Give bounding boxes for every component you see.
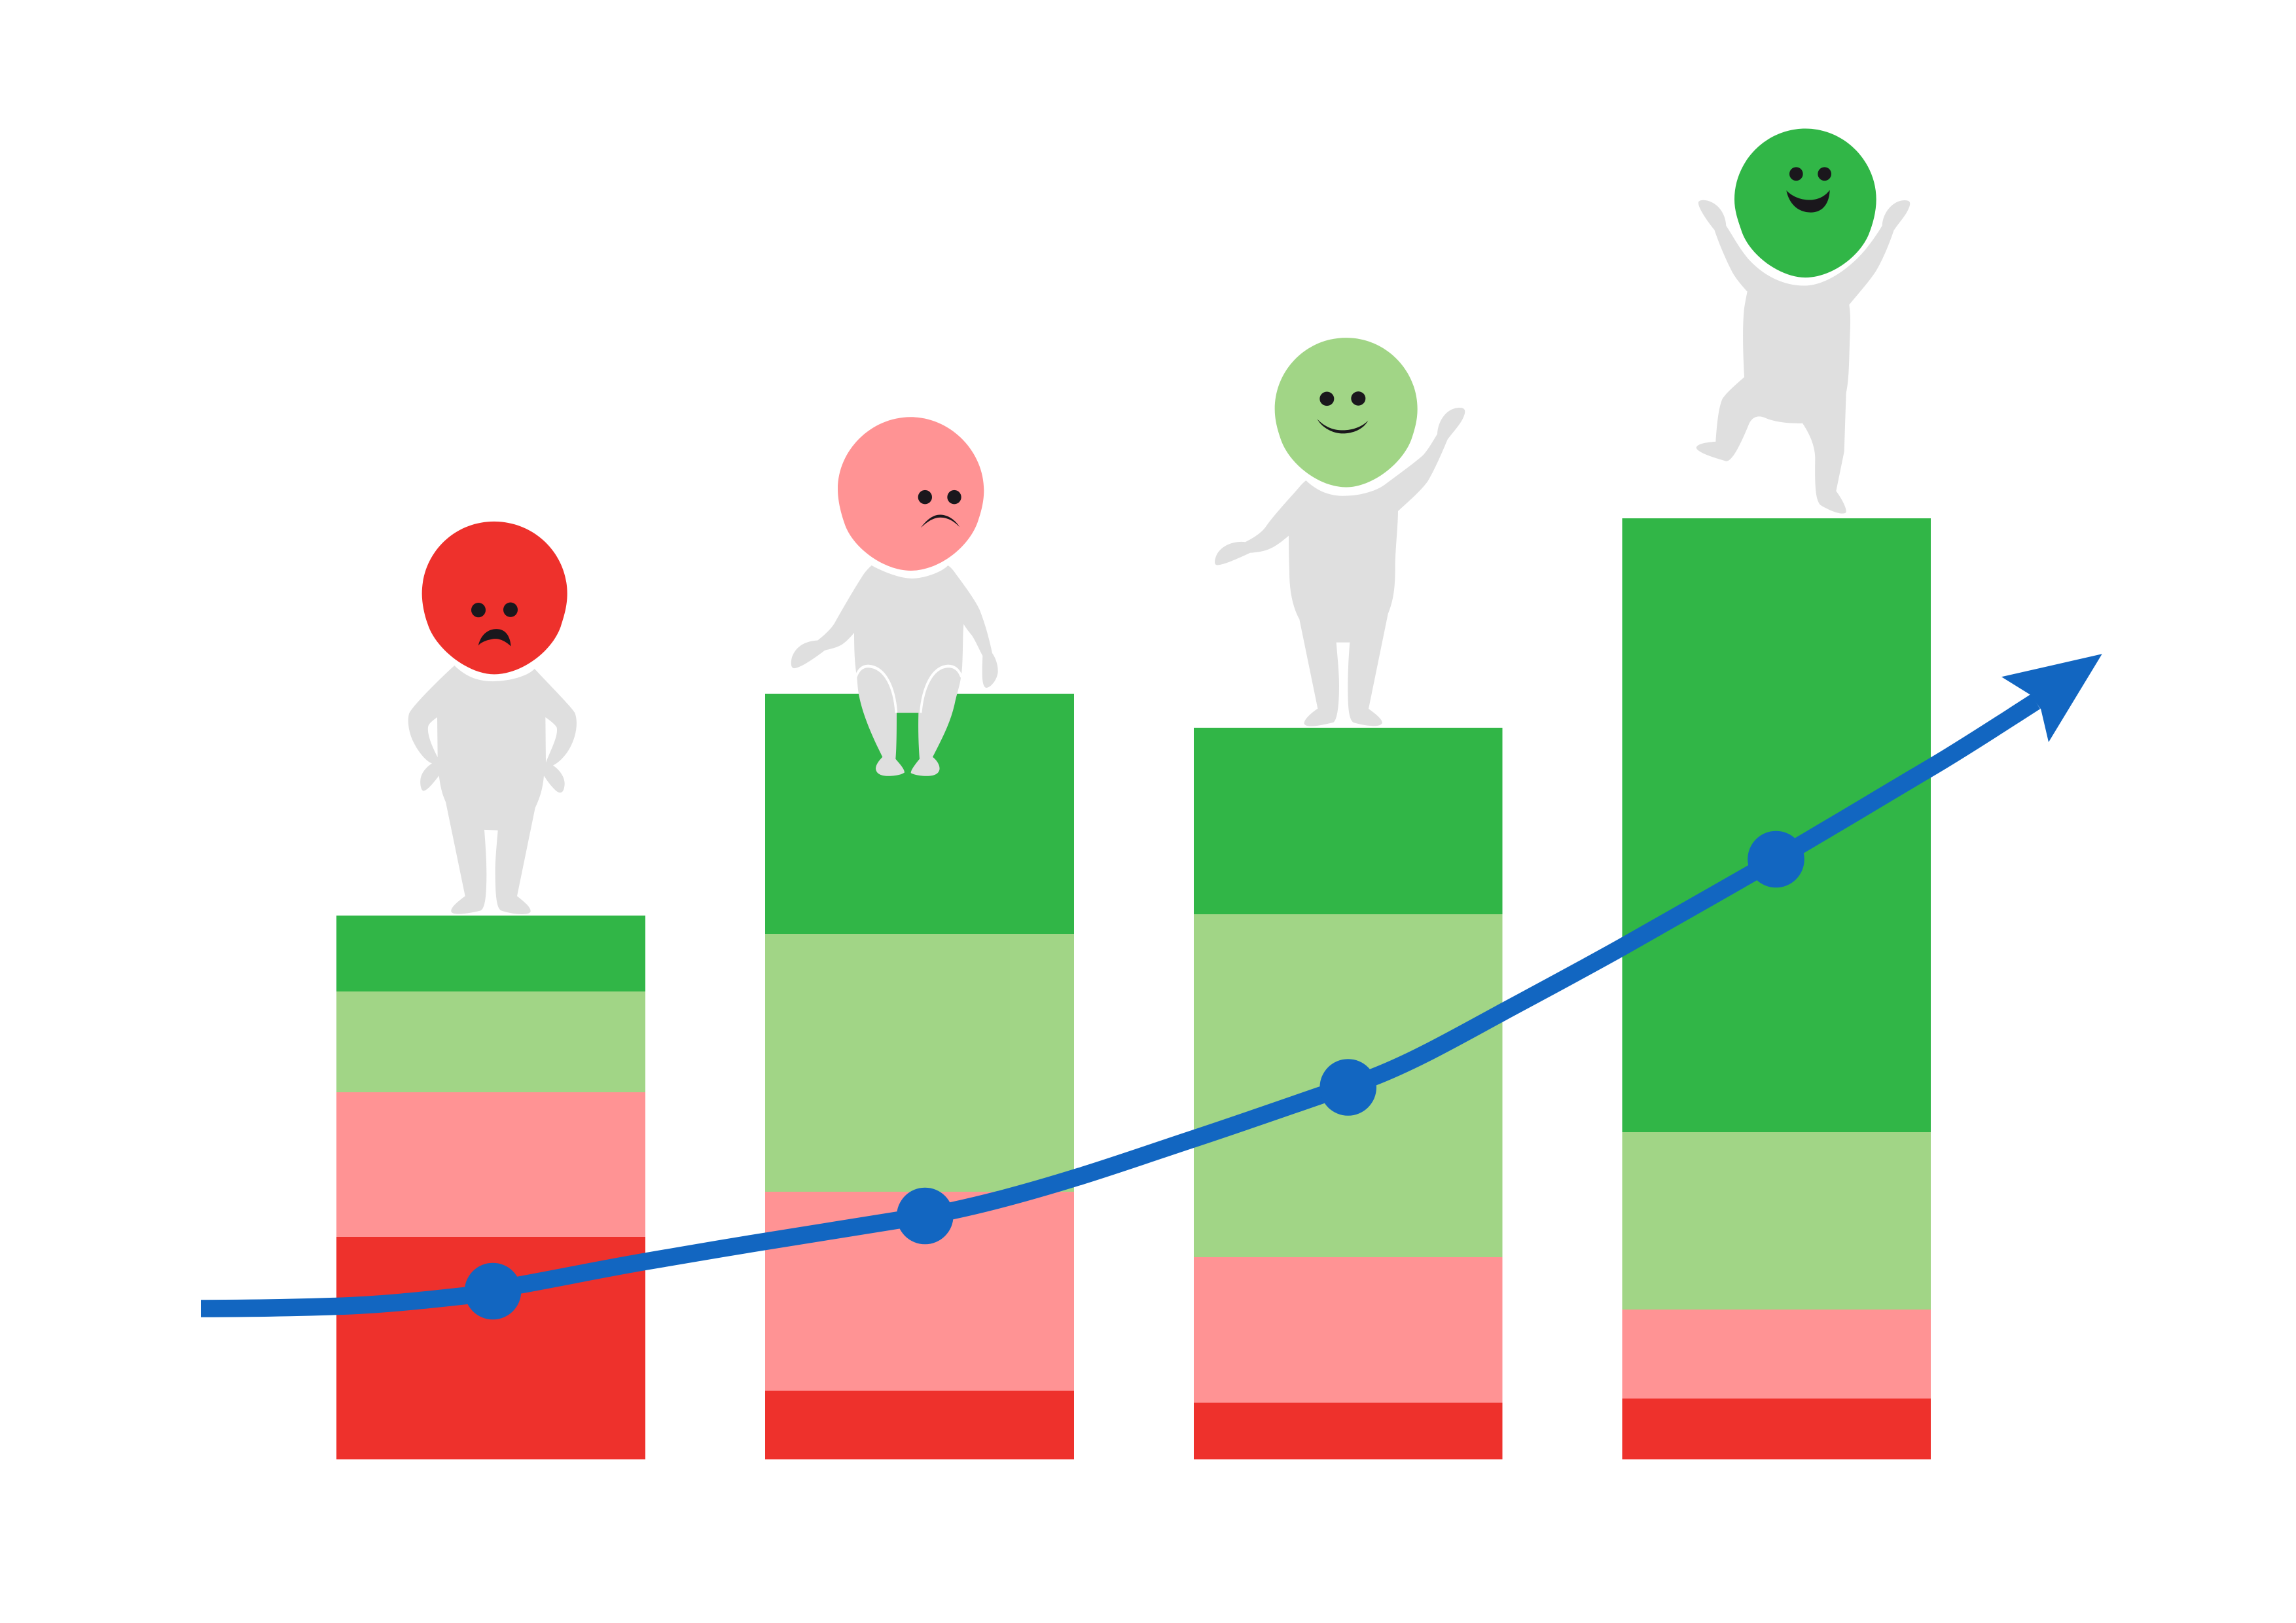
character 4: happy green face, jumping with arms raised xyxy=(1696,129,1910,514)
trend arrow with data points xyxy=(201,654,2102,1319)
stacked bar 2 xyxy=(765,694,1074,1459)
character 3: smiling light green face, waving xyxy=(1215,338,1465,726)
character 2: sad pink face, sitting on bar xyxy=(791,417,998,776)
stacked bar 4 xyxy=(1622,518,1931,1459)
stacked bar 3 xyxy=(1194,728,1503,1459)
character 1: angry red face, hands on hips xyxy=(408,522,577,914)
stacked bar 1 xyxy=(336,916,645,1459)
